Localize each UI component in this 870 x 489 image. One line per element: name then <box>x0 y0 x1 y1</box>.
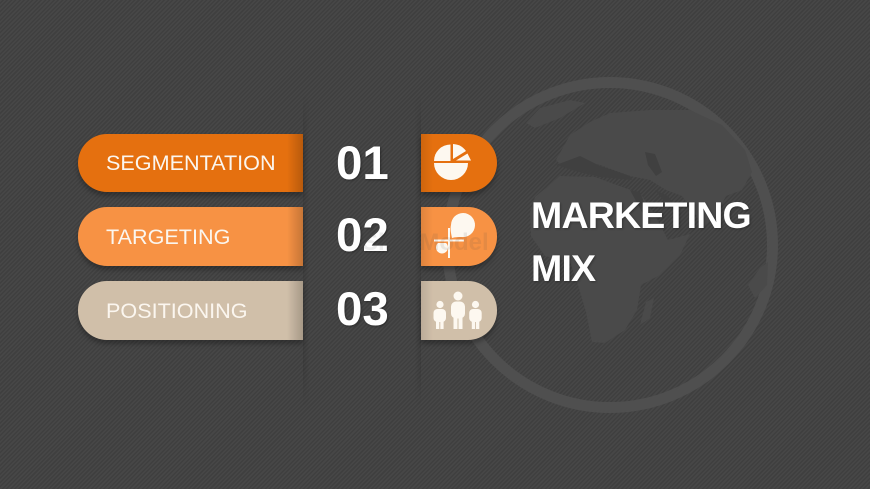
cap: pie chart icon <box>421 134 497 192</box>
title <box>531 194 751 289</box>
bar: positioning: POSITIONING <box>106 298 248 322</box>
number 03: 03 <box>336 283 389 336</box>
watermark text: SlideModel <box>362 229 489 256</box>
title: MIX <box>531 247 595 289</box>
bar: targeting <box>78 207 303 266</box>
bar: segmentation <box>78 134 303 192</box>
title: MARKETING <box>531 194 751 236</box>
bar: positioning <box>78 281 303 340</box>
number 02: 02 <box>336 209 389 262</box>
bar: segmentation: SEGMENTATION <box>106 150 276 175</box>
cap: segmentation matrix icon <box>421 207 497 266</box>
centre panel <box>303 96 421 406</box>
bar: targeting: TARGETING <box>106 224 230 248</box>
number 01: 01 <box>336 137 389 190</box>
cap: people icon <box>421 281 497 340</box>
